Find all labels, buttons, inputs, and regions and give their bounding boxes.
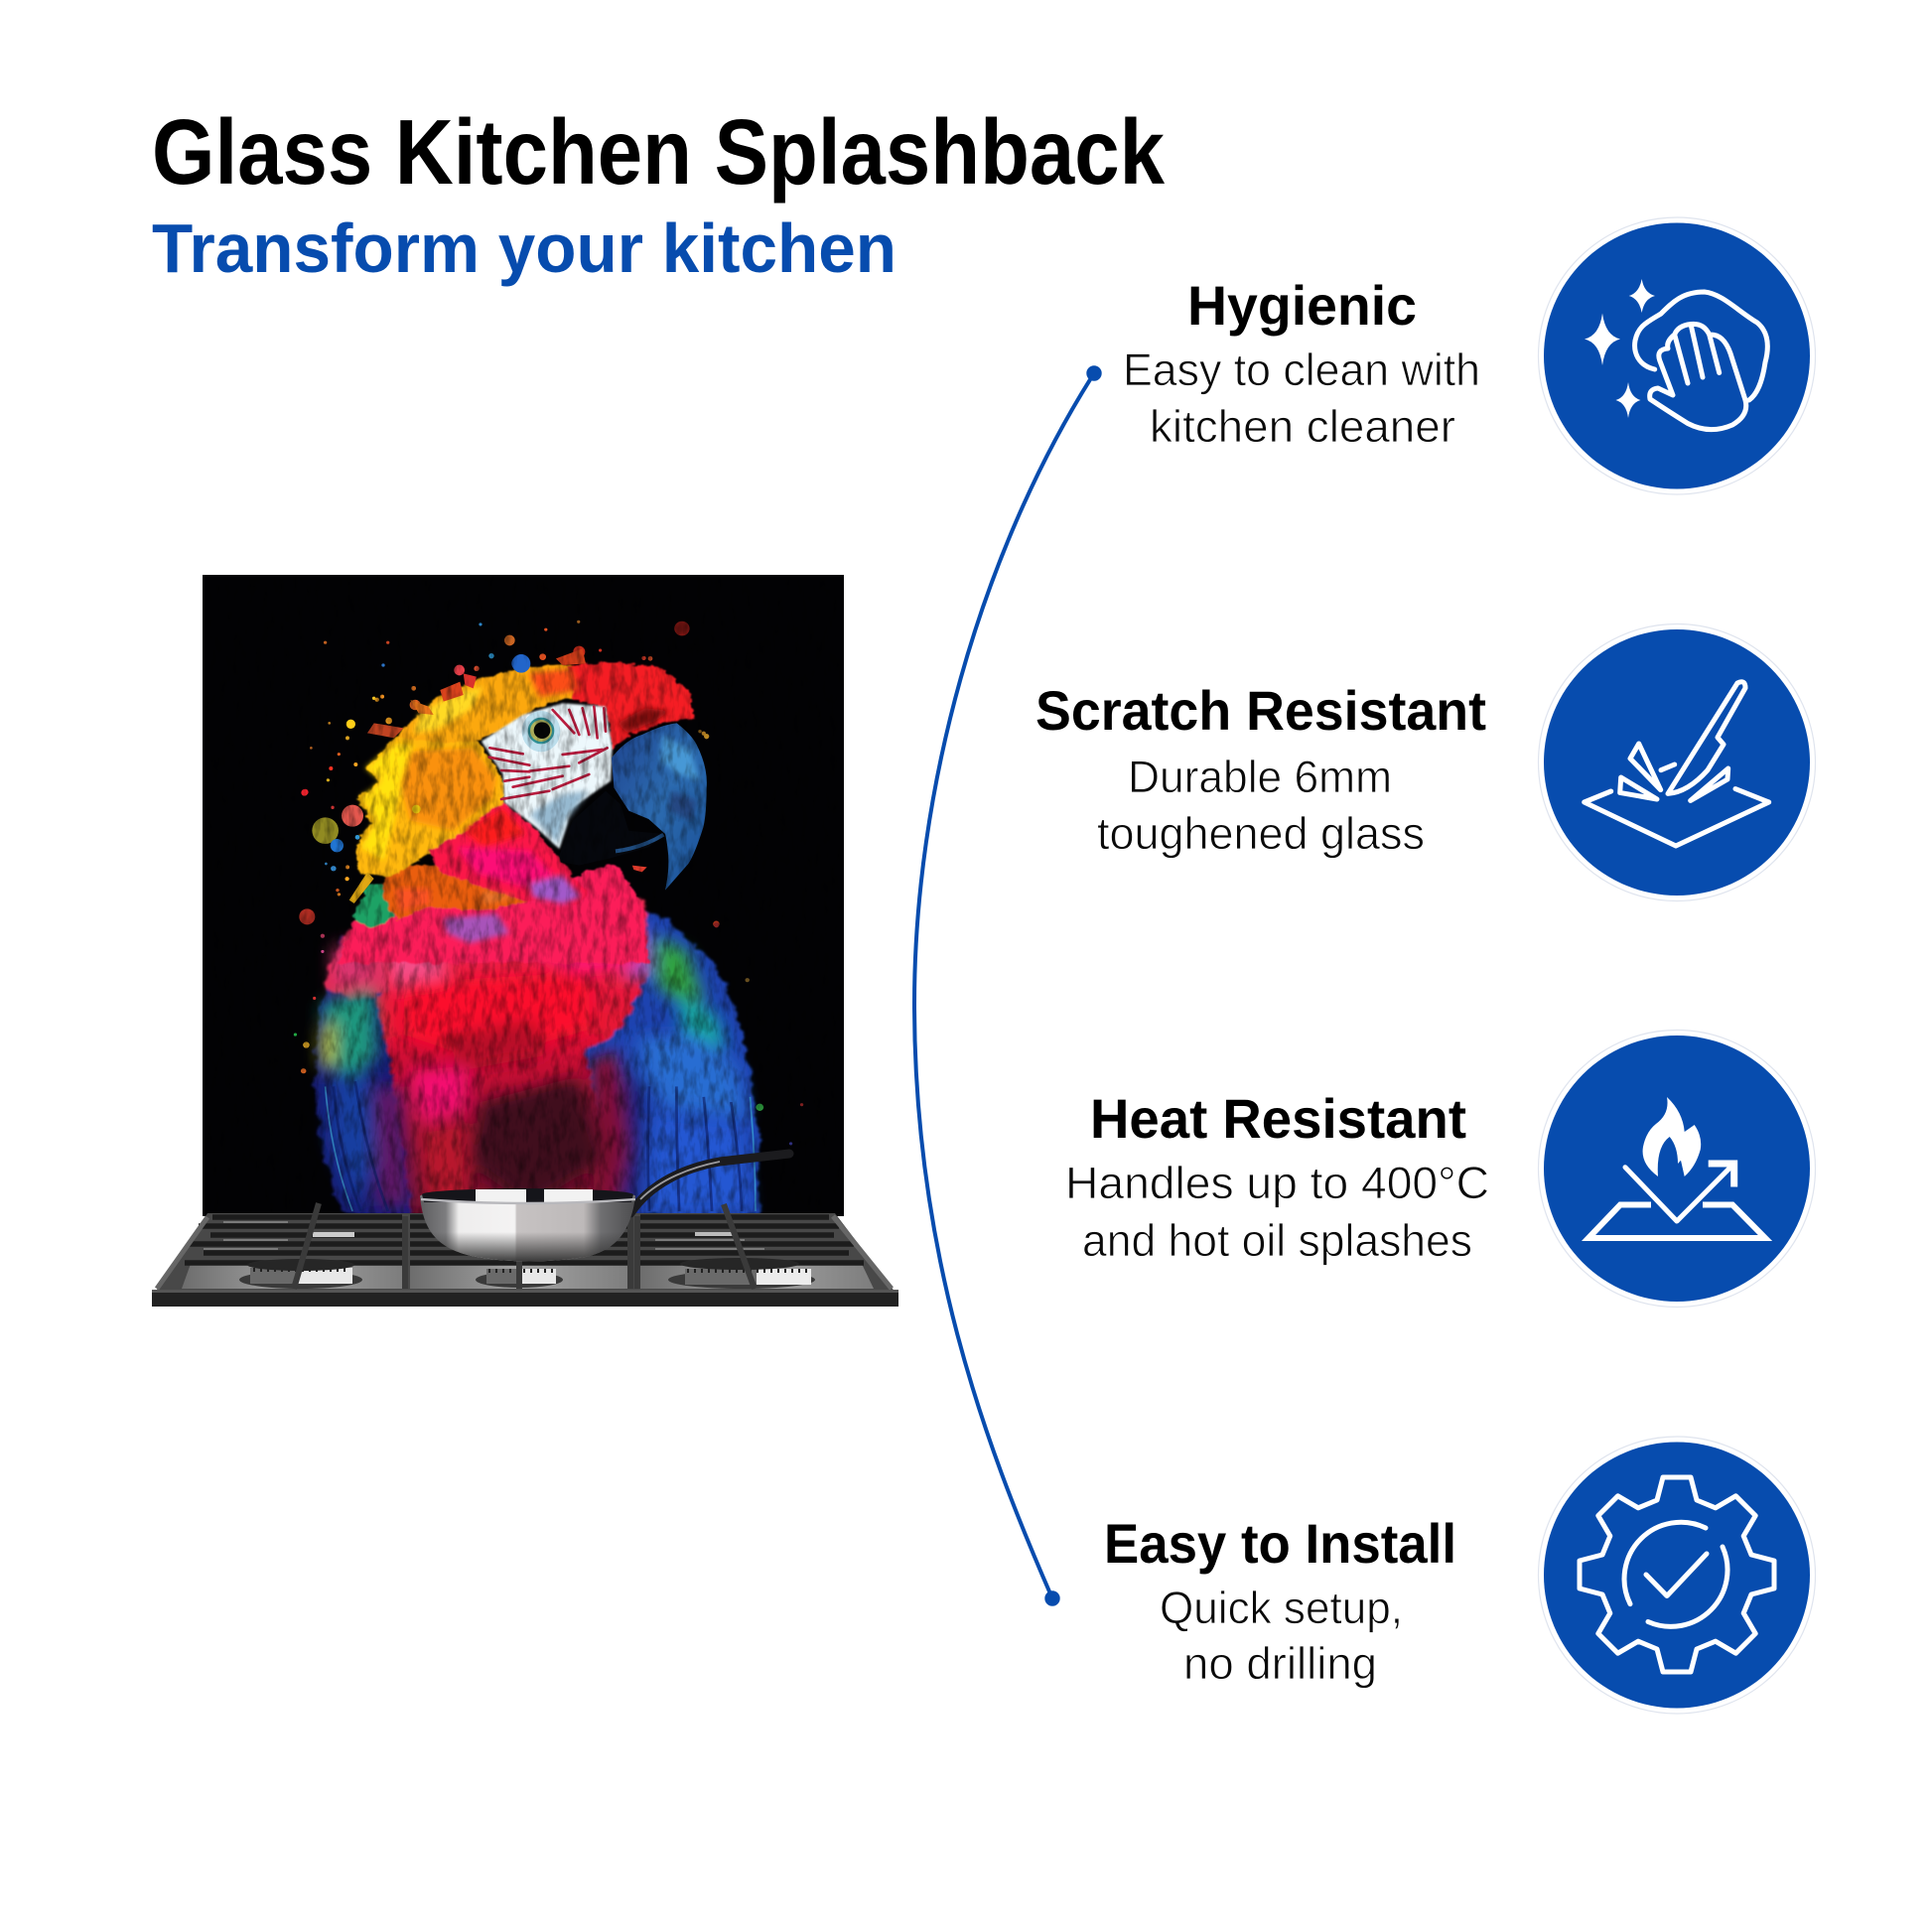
subtitle: Transform your kitchen xyxy=(152,209,897,287)
splatter around head xyxy=(299,635,719,927)
feature text: Scratch Resistant: Durable 6mm xyxy=(1128,752,1392,802)
icon: knife scratching glass xyxy=(1539,623,1815,901)
frying pan xyxy=(420,1154,789,1261)
feature text: Scratch Resistant: Scratch Resistant xyxy=(1035,679,1486,742)
burners xyxy=(239,1232,815,1289)
icon: gear with check mark xyxy=(1539,1437,1815,1714)
connector dot bottom xyxy=(1044,1590,1060,1606)
upper beak xyxy=(612,723,707,891)
feature text: Hygienic xyxy=(1123,274,1480,452)
feature text: Heat Resistant: Handles up to 400°C xyxy=(1065,1158,1489,1208)
feature text: Hygienic: kitchen cleaner xyxy=(1150,401,1455,452)
black splashback panel xyxy=(203,575,844,1216)
feature text: Easy to Install: Quick setup, xyxy=(1160,1583,1403,1633)
feature text: Heat Resistant: Heat Resistant xyxy=(1090,1087,1466,1150)
gas hob xyxy=(152,1203,898,1307)
feature text: Heat Resistant: and hot oil splashes xyxy=(1082,1215,1472,1266)
icon: hand wiping with sparkles xyxy=(1539,217,1815,494)
title: Glass Kitchen Splashback xyxy=(152,100,1165,204)
lower beak xyxy=(560,792,653,865)
face stripes xyxy=(489,707,608,799)
slanted grate supports xyxy=(294,1203,755,1289)
product image: splashback panel with parrot above hob xyxy=(152,575,898,1307)
feature text: Heat Resistant xyxy=(1065,1087,1489,1266)
feature text: Hygienic: Easy to clean with xyxy=(1123,345,1480,395)
wing feather streaks xyxy=(334,1081,742,1211)
steel panels xyxy=(182,1264,874,1289)
neck and chest top xyxy=(338,864,648,963)
feature text: Hygienic: Hygienic xyxy=(1187,274,1417,337)
front rim xyxy=(152,1291,898,1307)
paint splatter on the panel xyxy=(294,621,803,1145)
feature text: Easy to Install: Easy to Install xyxy=(1104,1512,1456,1575)
connector dot top xyxy=(1086,365,1102,381)
feature text: Scratch Resistant xyxy=(1035,679,1486,859)
icon: flame on reflective surface xyxy=(1539,1031,1815,1307)
eye xyxy=(522,711,560,752)
feature text: Easy to Install xyxy=(1104,1512,1456,1689)
grate bars xyxy=(185,1217,864,1263)
face shade xyxy=(529,791,589,844)
parrot artwork xyxy=(294,620,804,1213)
feature text: Scratch Resistant: toughened glass xyxy=(1097,808,1425,859)
hob base xyxy=(155,1213,896,1293)
feature text: Easy to Install: no drilling xyxy=(1183,1638,1377,1689)
white face patch xyxy=(482,703,613,849)
pan handle xyxy=(630,1154,789,1213)
connector curve xyxy=(914,365,1102,1606)
